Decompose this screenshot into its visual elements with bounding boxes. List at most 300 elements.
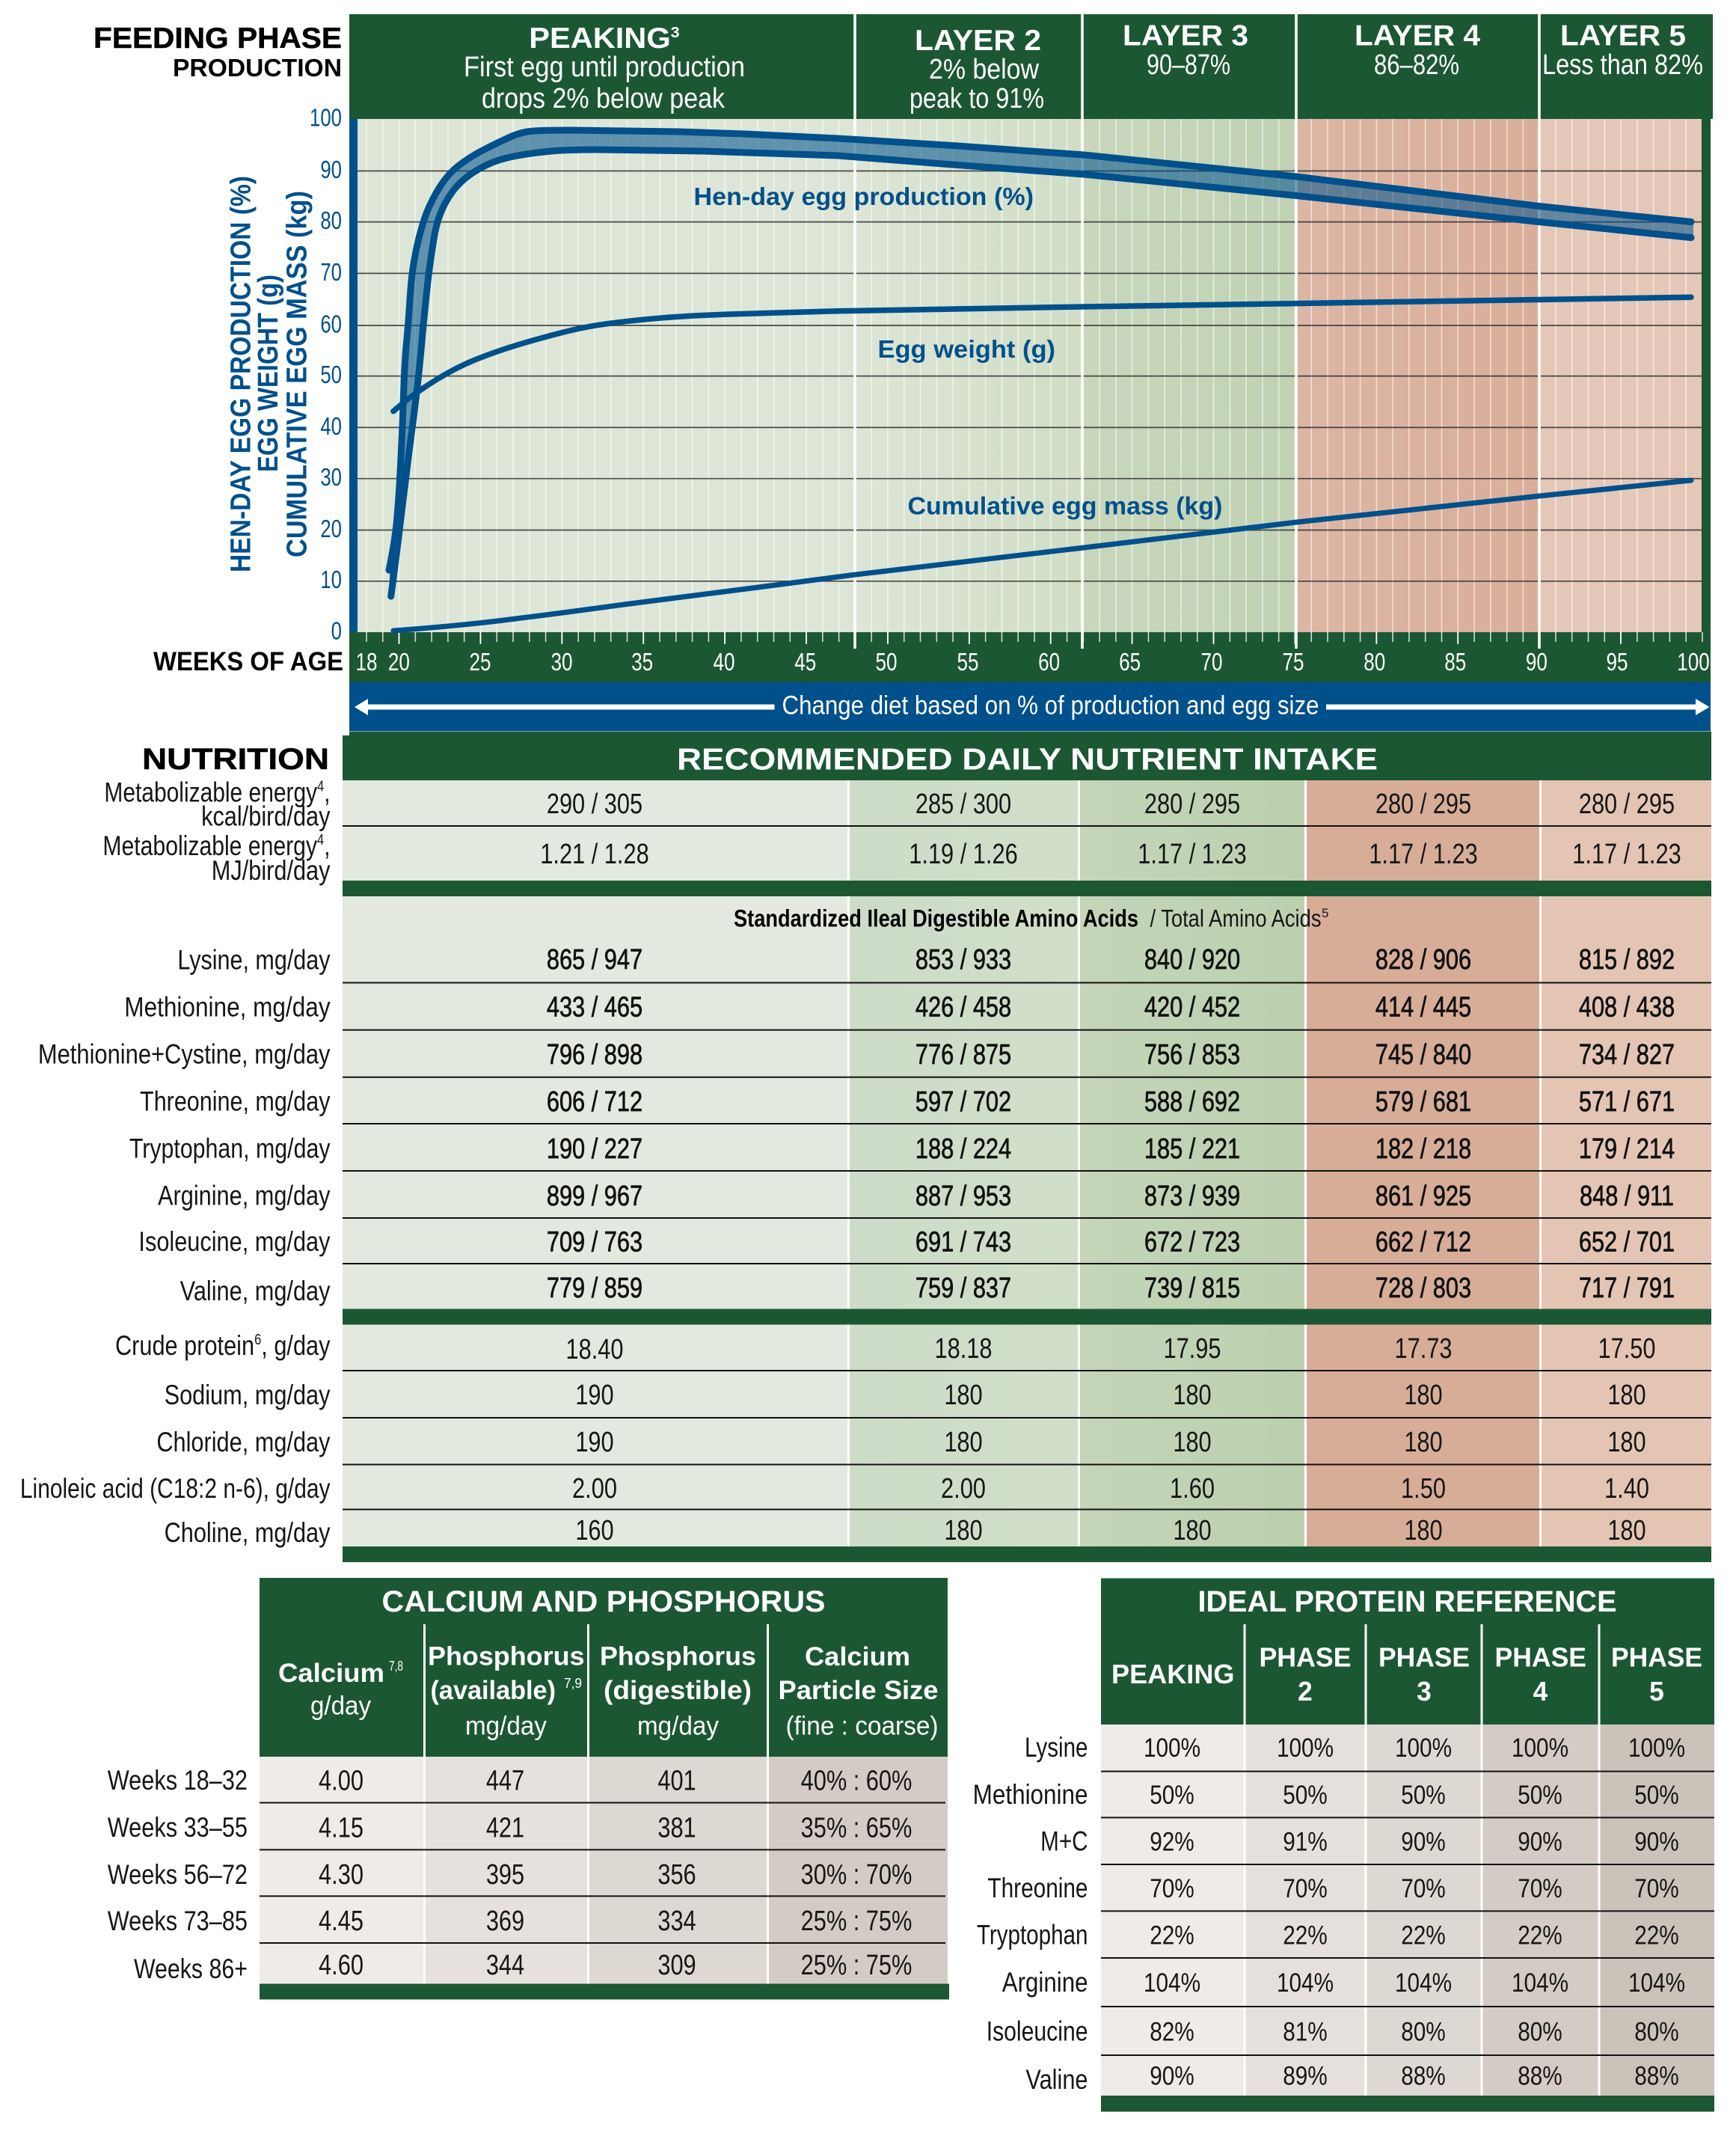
header band	[260, 1578, 948, 1757]
x axis numbers: 75	[1283, 649, 1304, 676]
row: isoleucine: Isoleucine	[987, 2016, 1088, 2047]
row: isoleucine: 691 / 743	[915, 1227, 1011, 1258]
row: isoleucine: 80%	[1634, 2017, 1679, 2046]
row: weeks 18-32: 4.00	[319, 1766, 364, 1796]
y axis numbers: 20	[320, 515, 342, 543]
row: methionine: 50%	[1283, 1781, 1328, 1810]
y axis numbers: 100	[310, 105, 342, 132]
row: isoleucine: 81%	[1283, 2017, 1328, 2046]
column head: phosphorus digestible: (digestible)	[604, 1676, 752, 1705]
row: m+c: 91%	[1283, 1827, 1328, 1856]
row: valine: 717 / 791	[1579, 1273, 1675, 1304]
row: valine: 88%	[1634, 2061, 1679, 2090]
row: crude protein: 17.95	[1164, 1333, 1221, 1365]
curve: cumulative egg mass	[393, 480, 1691, 631]
phase header: layer 5: Less than 82%	[1542, 49, 1703, 81]
row: tryptophan	[977, 1920, 1679, 1950]
row: lysine: 865 / 947	[547, 944, 642, 976]
curve: egg weight	[393, 297, 1691, 411]
x axis numbers	[356, 649, 1710, 676]
bottom band	[1101, 2096, 1714, 2111]
row: weeks 73-85: 4.45	[319, 1906, 364, 1937]
y axis numbers: 60	[320, 311, 342, 338]
curve label: hen-day egg production: Hen-day egg production (%)	[694, 183, 1034, 210]
row: metabolizable energy kcal: Metabolizable energy	[104, 778, 317, 808]
column backgrounds	[260, 1757, 948, 1984]
y axis numbers: 80	[320, 207, 342, 235]
column head: phosphorus available	[428, 1641, 585, 1740]
x axis numbers: 20	[388, 649, 410, 676]
row: threonine	[987, 1873, 1679, 1904]
phase header: layer 2	[910, 25, 1044, 114]
arrow: left	[355, 699, 775, 715]
curve label: cumulative egg mass: Cumulative egg mass (kg)	[908, 492, 1222, 519]
row: lysine: 815 / 892	[1579, 944, 1675, 976]
row: valine: 89%	[1283, 2061, 1328, 2090]
column head: phase 3	[1378, 1641, 1470, 1707]
row: metabolizable energy MJ: ,	[324, 830, 330, 862]
row: methionine	[973, 1780, 1679, 1811]
row: weeks 86+: 25% : 75%	[801, 1950, 912, 1981]
column head: phase 4: PHASE	[1494, 1641, 1586, 1673]
row: valine: 739 / 815	[1144, 1273, 1240, 1304]
row: methionine+cystine: Methionine+Cystine, mg/day	[38, 1039, 330, 1070]
row: linoleic acid: 2.00	[572, 1473, 617, 1505]
row: arginine: 887 / 953	[915, 1181, 1011, 1212]
axis bar left	[349, 119, 358, 632]
row: arginine	[158, 1181, 1674, 1212]
row: choline: 180	[944, 1515, 983, 1546]
row: methionine: Methionine	[973, 1780, 1088, 1811]
row: sodium: Sodium, mg/day	[165, 1380, 331, 1411]
row: weeks 33-55: Weeks 33–55	[108, 1812, 248, 1843]
chart label: production: PRODUCTION	[173, 55, 342, 82]
column head: phosphorus digestible: Phosphorus	[600, 1641, 756, 1671]
sub-heading: amino acids: / Total Amino Acids	[1150, 905, 1321, 932]
column head: calcium: 7,8	[389, 1659, 403, 1674]
row: arginine: 104%	[1144, 1968, 1200, 1998]
row: metabolizable energy kcal: 4	[317, 778, 324, 795]
row: arginine: 104%	[1512, 1968, 1568, 1998]
row: isoleucine: 82%	[1150, 2017, 1194, 2046]
row: arginine: 104%	[1395, 1968, 1452, 1998]
row: weeks 86+: 309	[657, 1950, 696, 1981]
x axis numbers: 18	[356, 649, 377, 676]
column head: particle size: Calcium	[805, 1642, 910, 1671]
row: methionine: Methionine, mg/day	[124, 992, 331, 1023]
column head: phosphorus available: mg/day	[465, 1712, 547, 1740]
row: linoleic acid: 1.60	[1170, 1473, 1215, 1505]
phase header: peaking: First egg until production	[464, 52, 745, 83]
row: choline: 180	[1404, 1515, 1443, 1546]
row: threonine: Threonine	[987, 1873, 1088, 1904]
row: isoleucine: 672 / 723	[1144, 1227, 1240, 1258]
x axis numbers: 50	[876, 649, 897, 676]
row: sodium: 180	[944, 1380, 983, 1411]
row: methionine: 50%	[1518, 1781, 1562, 1810]
row: chloride: 180	[1607, 1427, 1646, 1458]
row: metabolizable energy MJ: 1.17 / 1.23	[1138, 839, 1247, 870]
x axis numbers: 40	[714, 649, 734, 676]
y axis numbers: 0	[331, 618, 342, 645]
row: threonine: Threonine, mg/day	[140, 1086, 331, 1117]
plot background: layer 4	[1296, 119, 1539, 632]
table title band	[343, 735, 1711, 780]
axis bar right	[1702, 119, 1711, 632]
row: chloride: 180	[944, 1427, 983, 1458]
plot background: layer 5	[1539, 119, 1702, 632]
row: weeks 73-85: Weeks 73–85	[108, 1906, 248, 1937]
column head: phase 4	[1494, 1641, 1586, 1707]
row: valine: 88%	[1518, 2061, 1562, 2090]
row: methionine: 50%	[1150, 1781, 1194, 1810]
table title: IDEAL PROTEIN REFERENCE	[1198, 1585, 1617, 1618]
row: weeks 73-85: 369	[486, 1906, 524, 1937]
row: crude protein: 17.73	[1395, 1333, 1452, 1365]
row: valine: 759 / 837	[915, 1273, 1011, 1304]
row: sodium: 180	[1607, 1380, 1646, 1411]
row: lysine	[177, 944, 1675, 976]
x axis title: weeks of age: WEEKS OF AGE	[153, 646, 343, 676]
y axis title: cumulative egg mass: CUMULATIVE EGG MASS (kg)	[281, 191, 313, 557]
diet change band	[349, 682, 1711, 731]
column head: calcium	[278, 1659, 403, 1721]
row: methionine+cystine: 776 / 875	[915, 1039, 1011, 1071]
column backgrounds	[1101, 1725, 1714, 2096]
row: tryptophan: 22%	[1634, 1921, 1679, 1950]
row: methionine+cystine	[38, 1039, 1675, 1071]
row: threonine: 70%	[1634, 1874, 1679, 1903]
row: m+c: M+C	[1040, 1826, 1088, 1857]
column head: phase 5: PHASE	[1611, 1641, 1702, 1673]
phase header: layer 2: LAYER 2	[915, 25, 1041, 57]
column head: calcium: Calcium	[278, 1659, 384, 1688]
column head: peaking: PEAKING	[1111, 1659, 1234, 1689]
row: weeks 18-32: 40% : 60%	[801, 1766, 912, 1796]
row: methionine: 50%	[1634, 1781, 1679, 1810]
column head: phosphorus digestible: mg/day	[637, 1712, 719, 1740]
row: arginine: Arginine, mg/day	[158, 1181, 331, 1211]
row: weeks 33-55: 4.15	[319, 1813, 364, 1843]
row: crude protein	[115, 1330, 1655, 1365]
row: weeks 86+: 4.60	[319, 1950, 364, 1981]
row: threonine: 588 / 692	[1144, 1086, 1240, 1118]
column head: phase 3: PHASE	[1378, 1641, 1470, 1673]
column head: phase 2: 2	[1298, 1677, 1313, 1707]
row: tryptophan	[129, 1133, 1675, 1165]
row: threonine: 70%	[1518, 1874, 1562, 1903]
column head: phase 4: 4	[1533, 1677, 1548, 1707]
panel: calcium and phosphorus	[108, 1578, 949, 1999]
row: weeks 33-55	[108, 1812, 912, 1843]
panel: recommended daily nutrient intake	[20, 732, 1711, 1562]
row: tryptophan: 188 / 224	[915, 1133, 1011, 1165]
row: arginine: 848 / 911	[1580, 1181, 1674, 1212]
row: valine: 88%	[1401, 2061, 1446, 2090]
row: metabolizable energy MJ	[102, 830, 1681, 887]
row: crude protein: 17.50	[1598, 1333, 1655, 1365]
row: weeks 56-72	[108, 1859, 912, 1891]
row: metabolizable energy MJ: 1.17 / 1.23	[1572, 839, 1681, 870]
y axis title: egg weight: EGG WEIGHT (g)	[253, 275, 284, 472]
row: threonine: 571 / 671	[1579, 1086, 1675, 1118]
row: threonine: 606 / 712	[547, 1086, 642, 1118]
row: chloride: 190	[575, 1427, 614, 1458]
y axis numbers: 90	[320, 156, 342, 184]
phase header: peaking: drops 2% below peak	[482, 83, 726, 114]
panel: production chart	[93, 14, 1713, 731]
row: linoleic acid: 1.50	[1401, 1473, 1446, 1505]
row: metabolizable energy kcal	[104, 778, 1675, 832]
row: threonine: 579 / 681	[1375, 1086, 1471, 1118]
row: weeks 73-85	[108, 1906, 912, 1937]
row: lysine: 853 / 933	[915, 944, 1011, 976]
row: lysine: 100%	[1144, 1733, 1200, 1763]
row: metabolizable energy MJ: 1.21 / 1.28	[540, 839, 649, 870]
column head: phosphorus available: 7,9	[564, 1676, 582, 1691]
row: weeks 18-32	[108, 1765, 912, 1796]
phase header: layer 4: 86–82%	[1374, 49, 1459, 81]
bottom band	[343, 1546, 1711, 1562]
row: choline: 180	[1607, 1515, 1646, 1546]
column head: particle size	[778, 1642, 938, 1740]
band text: Change diet based on % of production and egg size	[782, 691, 1319, 720]
row: tryptophan: 22%	[1401, 1921, 1446, 1950]
x axis numbers: 45	[794, 649, 816, 676]
row: arginine: 104%	[1628, 1968, 1685, 1998]
sub-heading: amino acids: 5	[1322, 906, 1328, 920]
phase header: peaking: PEAKING	[529, 22, 671, 55]
row: metabolizable energy kcal: 285 / 300	[915, 789, 1011, 820]
row: linoleic acid: 2.00	[941, 1473, 986, 1505]
row: tryptophan: 185 / 221	[1144, 1133, 1240, 1165]
row: tryptophan: 22%	[1150, 1921, 1194, 1950]
x axis numbers: 70	[1201, 649, 1222, 676]
plot background: peaking	[358, 119, 855, 632]
row: valine: Valine, mg/day	[180, 1276, 331, 1307]
row: methionine+cystine: 756 / 853	[1144, 1039, 1240, 1071]
row: lysine: Lysine, mg/day	[177, 945, 331, 976]
row: weeks 33-55: 381	[657, 1813, 696, 1843]
row: metabolizable energy MJ: Metabolizable energy	[102, 830, 317, 862]
chart label: feeding phase: FEEDING PHASE	[93, 22, 342, 55]
separator band	[343, 1309, 1711, 1324]
row: lysine: 100%	[1395, 1733, 1452, 1763]
row: weeks 33-55: 35% : 65%	[801, 1813, 912, 1843]
column head: phase 2	[1260, 1641, 1351, 1707]
row: weeks 86+: 344	[486, 1950, 524, 1981]
row: threonine: 70%	[1401, 1874, 1446, 1903]
row: tryptophan: 179 / 214	[1579, 1133, 1675, 1165]
row: sodium: 180	[1404, 1380, 1443, 1411]
row: choline: 160	[575, 1515, 614, 1546]
row: crude protein: 18.18	[935, 1333, 992, 1365]
plot background: layer 3	[1082, 119, 1296, 632]
row: linoleic acid	[20, 1473, 1649, 1505]
phase header: layer 5	[1542, 19, 1703, 81]
row: valine: 90%	[1150, 2061, 1194, 2090]
row: metabolizable energy MJ: 1.19 / 1.26	[909, 839, 1018, 870]
column head: phase 5	[1611, 1641, 1702, 1707]
row: metabolizable energy kcal: 280 / 295	[1579, 789, 1675, 820]
row: arginine: 873 / 939	[1144, 1181, 1240, 1212]
bottom band	[260, 1984, 949, 1999]
row: methionine: 408 / 438	[1579, 992, 1675, 1023]
y axis numbers	[310, 105, 342, 645]
x axis numbers: 95	[1607, 649, 1628, 676]
row: linoleic acid: 1.40	[1604, 1473, 1649, 1505]
row: isoleucine: 80%	[1518, 2017, 1562, 2046]
row: lysine	[1025, 1733, 1685, 1763]
row: lysine: 840 / 920	[1144, 944, 1240, 976]
row: tryptophan: Tryptophan, mg/day	[129, 1133, 331, 1164]
row: weeks 18-32: Weeks 18–32	[108, 1765, 248, 1796]
row: methionine: 426 / 458	[915, 992, 1011, 1023]
phase header: peaking	[464, 22, 745, 114]
x axis numbers: 100	[1677, 649, 1710, 676]
phase header: layer 3: 90–87%	[1147, 49, 1230, 81]
x axis numbers: 65	[1119, 649, 1141, 676]
column head: phosphorus digestible	[600, 1641, 756, 1740]
row: arginine: 899 / 967	[547, 1181, 642, 1212]
y axis numbers: 30	[320, 464, 342, 492]
row: m+c: 90%	[1634, 1827, 1679, 1856]
curve: hen-day egg production band	[389, 130, 1693, 596]
table title: CALCIUM AND PHOSPHORUS	[381, 1585, 826, 1618]
row: methionine: 50%	[1401, 1781, 1446, 1810]
row: weeks 18-32: 401	[657, 1766, 696, 1796]
row: choline: Choline, mg/day	[165, 1517, 331, 1549]
arrow: right	[1326, 699, 1710, 715]
row: weeks 86+: Weeks 86+	[134, 1953, 248, 1985]
row: threonine	[140, 1086, 1675, 1118]
y axis numbers: 40	[320, 413, 342, 441]
row: isoleucine	[138, 1226, 1675, 1258]
row: weeks 56-72: 395	[486, 1859, 524, 1891]
y axis numbers: 10	[320, 566, 342, 594]
row: chloride: 180	[1404, 1427, 1443, 1458]
table title: RECOMMENDED DAILY NUTRIENT INTAKE	[677, 742, 1378, 777]
row: arginine	[1002, 1968, 1685, 1998]
row: valine	[1025, 2061, 1679, 2096]
column head: phase 5: 5	[1649, 1677, 1664, 1707]
row: methionine	[124, 992, 1675, 1023]
row: arginine: Arginine	[1002, 1968, 1088, 1998]
x axis numbers: 90	[1526, 649, 1548, 676]
row: isoleucine: 652 / 701	[1579, 1227, 1675, 1258]
row: weeks 73-85: 25% : 75%	[801, 1906, 912, 1937]
row: tryptophan: 190 / 227	[547, 1133, 642, 1165]
row: valine	[180, 1273, 1675, 1307]
row: sodium: 190	[575, 1380, 614, 1411]
column head: phase 2: PHASE	[1260, 1641, 1351, 1673]
x axis numbers: 25	[470, 649, 491, 676]
row: lysine: 100%	[1628, 1733, 1685, 1763]
nutrition heading: NUTRITION	[142, 743, 329, 776]
x axis numbers: 80	[1364, 649, 1385, 676]
row: methionine+cystine: 796 / 898	[547, 1039, 642, 1071]
row: isoleucine: 709 / 763	[547, 1227, 642, 1258]
row: m+c: 90%	[1518, 1827, 1562, 1856]
row: tryptophan: Tryptophan	[977, 1920, 1088, 1950]
row: crude protein: 18.40	[566, 1334, 623, 1365]
row: methionine: 414 / 445	[1375, 992, 1471, 1023]
row: lysine: 100%	[1512, 1733, 1568, 1763]
row: crude protein: 6	[254, 1331, 261, 1347]
row: crude protein: Crude protein	[115, 1330, 254, 1362]
row: lysine: Lysine	[1025, 1733, 1088, 1763]
week axis band	[349, 632, 1711, 682]
separator band	[343, 881, 1711, 896]
row: weeks 56-72: 356	[657, 1859, 696, 1891]
row: metabolizable energy kcal: 280 / 295	[1144, 789, 1240, 820]
panel: ideal protein reference	[973, 1579, 1714, 2111]
row: valine: Valine	[1025, 2064, 1088, 2096]
row: lysine: 828 / 906	[1375, 944, 1471, 976]
row: metabolizable energy MJ: MJ/bird/day	[212, 855, 331, 887]
header band	[1101, 1579, 1714, 1725]
row: tryptophan: 22%	[1283, 1921, 1328, 1950]
row: methionine+cystine: 734 / 827	[1579, 1039, 1675, 1071]
sub-heading: amino acids: Standardized Ileal Digestible Amino Acids	[734, 905, 1138, 932]
row: tryptophan: 22%	[1518, 1921, 1562, 1950]
row: methionine: 433 / 465	[547, 992, 642, 1023]
x axis numbers: 35	[631, 649, 653, 676]
row: metabolizable energy MJ: 1.17 / 1.23	[1369, 839, 1478, 870]
column head: particle size: (fine : coarse)	[785, 1712, 938, 1740]
row: weeks 56-72: 30% : 70%	[801, 1859, 912, 1891]
phase header: layer 4: LAYER 4	[1355, 19, 1481, 52]
row: weeks 33-55: 421	[486, 1813, 524, 1843]
phase header: layer 3	[1123, 19, 1248, 81]
row: metabolizable energy kcal: kcal/bird/day	[201, 801, 330, 832]
y axis title: hen-day egg production: HEN-DAY EGG PRODUCTION (%)	[226, 176, 257, 572]
row: weeks 18-32: 447	[486, 1766, 524, 1796]
row: isoleucine: Isoleucine, mg/day	[138, 1226, 331, 1258]
x axis numbers: 60	[1038, 649, 1060, 676]
y axis numbers: 70	[320, 259, 342, 287]
row: metabolizable energy kcal: 280 / 295	[1375, 789, 1471, 820]
phase header: peaking: 3	[671, 25, 680, 41]
feeding phase header band	[349, 14, 1713, 119]
row: metabolizable energy MJ: 4	[317, 830, 324, 848]
phase header: layer 2: 2% below	[929, 54, 1039, 85]
y axis numbers: 50	[320, 361, 342, 389]
column head: calcium: g/day	[310, 1691, 371, 1721]
row: isoleucine: 662 / 712	[1375, 1227, 1471, 1258]
row: threonine: 70%	[1150, 1874, 1194, 1903]
row: chloride	[156, 1427, 1646, 1458]
row: choline: 180	[1173, 1515, 1212, 1546]
column head: phase 3: 3	[1417, 1677, 1432, 1707]
column backgrounds	[343, 780, 1711, 1546]
row: tryptophan: 182 / 218	[1375, 1133, 1471, 1165]
row: threonine: 70%	[1283, 1874, 1328, 1903]
row: weeks 86+	[134, 1950, 912, 1985]
row: isoleucine	[987, 2016, 1679, 2047]
x axis numbers: 85	[1444, 649, 1466, 676]
phase header: layer 3: LAYER 3	[1123, 19, 1248, 52]
row: arginine: 861 / 925	[1375, 1181, 1471, 1212]
row: sodium	[165, 1380, 1646, 1411]
row: choline	[165, 1515, 1646, 1549]
row: metabolizable energy kcal: 290 / 305	[547, 789, 642, 820]
row: methionine+cystine: 745 / 840	[1375, 1039, 1471, 1071]
column head: phosphorus available: (available)	[431, 1676, 556, 1705]
row: weeks 56-72: Weeks 56–72	[108, 1859, 248, 1891]
row: isoleucine: 80%	[1401, 2017, 1446, 2046]
row: weeks 56-72: 4.30	[319, 1859, 364, 1891]
